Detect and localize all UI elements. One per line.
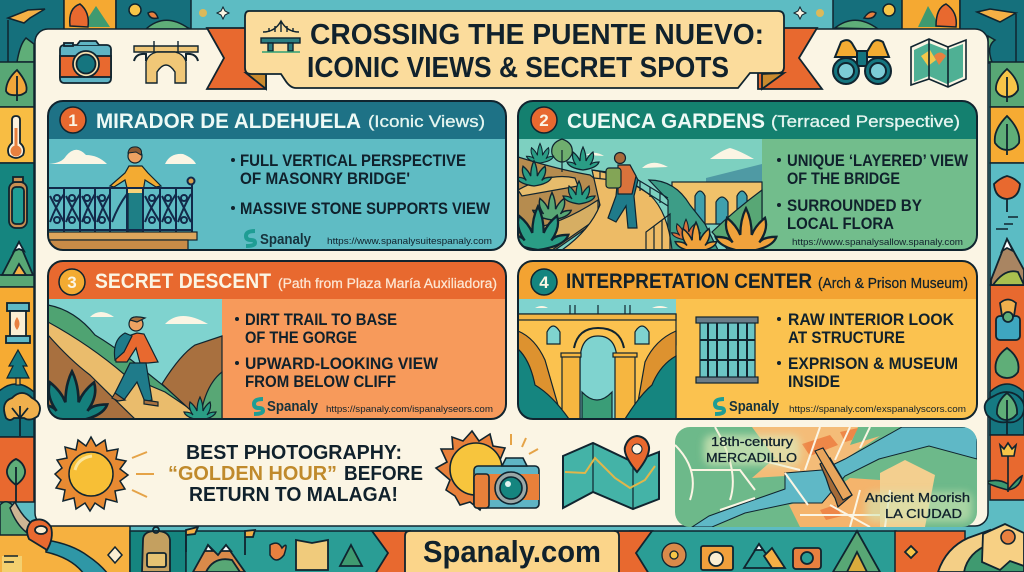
heading 1 (96, 110, 485, 133)
icon: big pine (833, 531, 880, 572)
map labels: 18th-century (711, 434, 794, 449)
hiker (608, 165, 638, 228)
border: bottom band (0, 502, 1024, 572)
greenery beyond the fence (649, 180, 718, 250)
icon: sun and camera (436, 431, 539, 510)
number badge 2 (531, 107, 557, 133)
map: river (692, 427, 977, 527)
footer text: Spanaly.com (423, 534, 601, 569)
golden hour callout: BEST PHOTOGRAPHY: (186, 442, 402, 464)
bullet list 1 (231, 151, 491, 218)
bullet list 4: RAW INTERIOR LOOK (788, 310, 955, 329)
border: top left tiles (0, 0, 191, 63)
icon: green leaf (995, 116, 1019, 155)
icon: cube bottom right (905, 524, 1024, 572)
illustration: arched bridge (518, 299, 676, 419)
number badge 4: 4 (539, 273, 549, 292)
bullet list 4: EXPRISON & MUSEUM (788, 354, 958, 373)
icon: suspension bridge (261, 21, 300, 52)
sparkles (199, 7, 824, 19)
distant bridge (672, 182, 762, 224)
illustration: hiker on dirt trail (37, 299, 222, 422)
icon: wave lines (996, 217, 1018, 229)
URL 2: https://www.spanalysallow.spanaly.com (792, 237, 963, 248)
map: bridge (815, 448, 852, 507)
header bar 4 (518, 261, 977, 299)
map labels: MERCADILLO (706, 450, 797, 465)
icon: sun (55, 437, 154, 511)
icon: brown mountain (991, 239, 1024, 285)
bullet list 3: UPWARD-LOOKING VIEW (245, 354, 439, 373)
footer 1: Spanaly logo and URL: Spanaly (260, 231, 312, 248)
heading 4: INTERPRETATION CENTER (566, 270, 812, 293)
map: roads (675, 427, 890, 527)
illustration: person at balcony (44, 147, 197, 252)
icon: flags and mountains (186, 527, 255, 572)
icon: folded map (296, 540, 328, 570)
icon: flower bottom (662, 543, 686, 567)
heading 2: (Terraced Perspective) (771, 113, 960, 131)
icon: backpack bottom (142, 527, 170, 572)
icon: camera (60, 41, 111, 83)
icon: backpack (996, 300, 1020, 340)
shrubs (526, 143, 554, 163)
golden hour callout: RETURN TO MALAGA! (189, 484, 398, 506)
heading 4 (566, 270, 968, 293)
icon: tulip (994, 176, 1020, 212)
icon: bottle (9, 177, 27, 228)
title text: ICONIC VIEWS & SECRET SPOTS (307, 52, 729, 84)
border: right column tiles (986, 62, 1024, 500)
icon: pine (340, 545, 362, 566)
ribbon: left tail (207, 28, 266, 89)
panel 3: Secret Descent (37, 261, 506, 422)
heading 1: MIRADOR DE ALDEHUELA (96, 110, 361, 133)
tree (552, 139, 572, 172)
bullet list 4 (777, 310, 958, 391)
heading 2: CUENCA GARDENS (567, 110, 765, 133)
bullet list 3: DIRT TRAIL TO BASE (245, 310, 397, 329)
footer banner: Spanaly.com (372, 531, 652, 572)
footer plate (405, 531, 619, 572)
bullet list 2 (777, 151, 969, 233)
icon: teal mountains (744, 544, 785, 568)
bullet list 1: FULL VERTICAL PERSPECTIVE (240, 151, 466, 170)
number badge 1 (60, 107, 86, 133)
bullet list 1: MASSIVE STONE SUPPORTS VIEW (240, 199, 491, 218)
banner plate (245, 11, 784, 88)
map: town areas (752, 427, 880, 478)
map labels: LA CIUDAD (885, 506, 962, 521)
icon: pine tree (7, 350, 29, 385)
icon: bridge line art (134, 41, 198, 83)
balcony railing (48, 178, 194, 232)
bullet list 3: FROM BELOW CLIFF (245, 372, 396, 391)
footer 3: Spanaly logo and URL: https://spanaly.com/ispanalyseors.com (326, 404, 493, 415)
footer 3: Spanaly logo and URL: Spanaly (267, 398, 319, 415)
map: Ronda districts (675, 427, 977, 527)
icon: barred prison window (696, 317, 758, 383)
title banner (207, 11, 822, 89)
bullet list 2: UNIQUE ‘LAYERED’ VIEW (787, 151, 969, 170)
header bar 2 (518, 101, 977, 139)
icon: yellow leaf (996, 69, 1018, 102)
map: label halos (704, 435, 800, 465)
map labels: Ancient Moorish (865, 490, 970, 505)
number badge 1: 1 (68, 111, 78, 130)
map labels (706, 434, 970, 521)
footer 3: Spanaly logo and URL (254, 398, 493, 415)
terraces (518, 157, 601, 250)
heading 3: SECRET DESCENT (95, 270, 271, 293)
footer 1: Spanaly logo and URL (246, 231, 492, 248)
icon: orange ball bottom right (1001, 530, 1015, 544)
icon: leaf in orange tile (7, 459, 25, 502)
icon: butterfly route (270, 543, 286, 560)
heading 1: (Iconic Views) (368, 113, 485, 131)
header bar 1 (48, 101, 506, 139)
footer 4: Spanaly logo and URL: Spanaly (729, 398, 780, 415)
number badge 4 (531, 269, 557, 295)
dirt path (562, 170, 672, 250)
illustration: terraced gardens (508, 139, 776, 252)
fence (592, 170, 670, 250)
heading 3: (Path from Plaza María Auxiliadora) (278, 276, 497, 291)
heading 4: (Arch & Prison Museum) (818, 276, 968, 292)
panel 4: Interpretation Center (518, 261, 977, 419)
bullet list 3 (235, 310, 439, 391)
border: top right tiles (833, 0, 1024, 63)
icon: binoculars (833, 40, 891, 84)
header bar 3 (48, 261, 506, 299)
icon: map top right (911, 39, 966, 87)
icon: map pin bottom left (27, 519, 52, 550)
icon: flower (986, 443, 1022, 492)
footer 1: Spanaly logo and URL: https://www.spanalysuitespanaly.com (327, 236, 492, 247)
heading 3 (95, 270, 497, 293)
golden hour callout: “GOLDEN HOUR” (168, 463, 337, 485)
number badge 2: 2 (539, 111, 549, 130)
bullet list 2: SURROUNDED BY (787, 196, 923, 215)
bullet list 2: LOCAL FLORA (787, 214, 894, 233)
title text (307, 19, 764, 84)
number badge 3 (59, 269, 85, 295)
bullet list 4: AT STRUCTURE (788, 328, 905, 347)
footer 4: Spanaly logo and URL (715, 398, 966, 415)
bullet list 1: OF MASONRY BRIDGE' (240, 169, 410, 188)
ribbon: footer tails (372, 531, 652, 572)
icon: tree overlapping left frame (4, 393, 40, 436)
title text: CROSSING THE PUENTE NUEVO: (310, 19, 764, 51)
panel 2: Cuenca Gardens (508, 101, 977, 252)
bullet list 2: OF THE BRIDGE (787, 169, 900, 188)
number badge 3: 3 (67, 273, 77, 292)
icon: diamond bottom left (108, 547, 122, 563)
bullet list 4: INSIDE (788, 372, 840, 391)
bullet list 3: OF THE GORGE (245, 328, 357, 347)
golden hour callout: BEFORE (344, 463, 423, 485)
ribbon: right tail (758, 28, 822, 89)
panel 1: Mirador de Aldehuela (44, 101, 506, 252)
icon: leaf (6, 70, 27, 101)
icon: thermometer (8, 116, 24, 158)
golden hour callout (168, 442, 423, 506)
icon: double tree overlapping right frame (985, 348, 1024, 435)
icon: lantern (6, 303, 30, 343)
icon: map with pin (563, 436, 659, 509)
icon: mountain (2, 242, 33, 275)
footer 4: Spanaly logo and URL: https://spanaly.com/exspanalyscors.com (789, 404, 966, 415)
heading 2 (567, 110, 960, 133)
icon: small camera (793, 548, 821, 569)
icon: orange camera (701, 546, 733, 570)
border: left column tiles (0, 62, 34, 502)
